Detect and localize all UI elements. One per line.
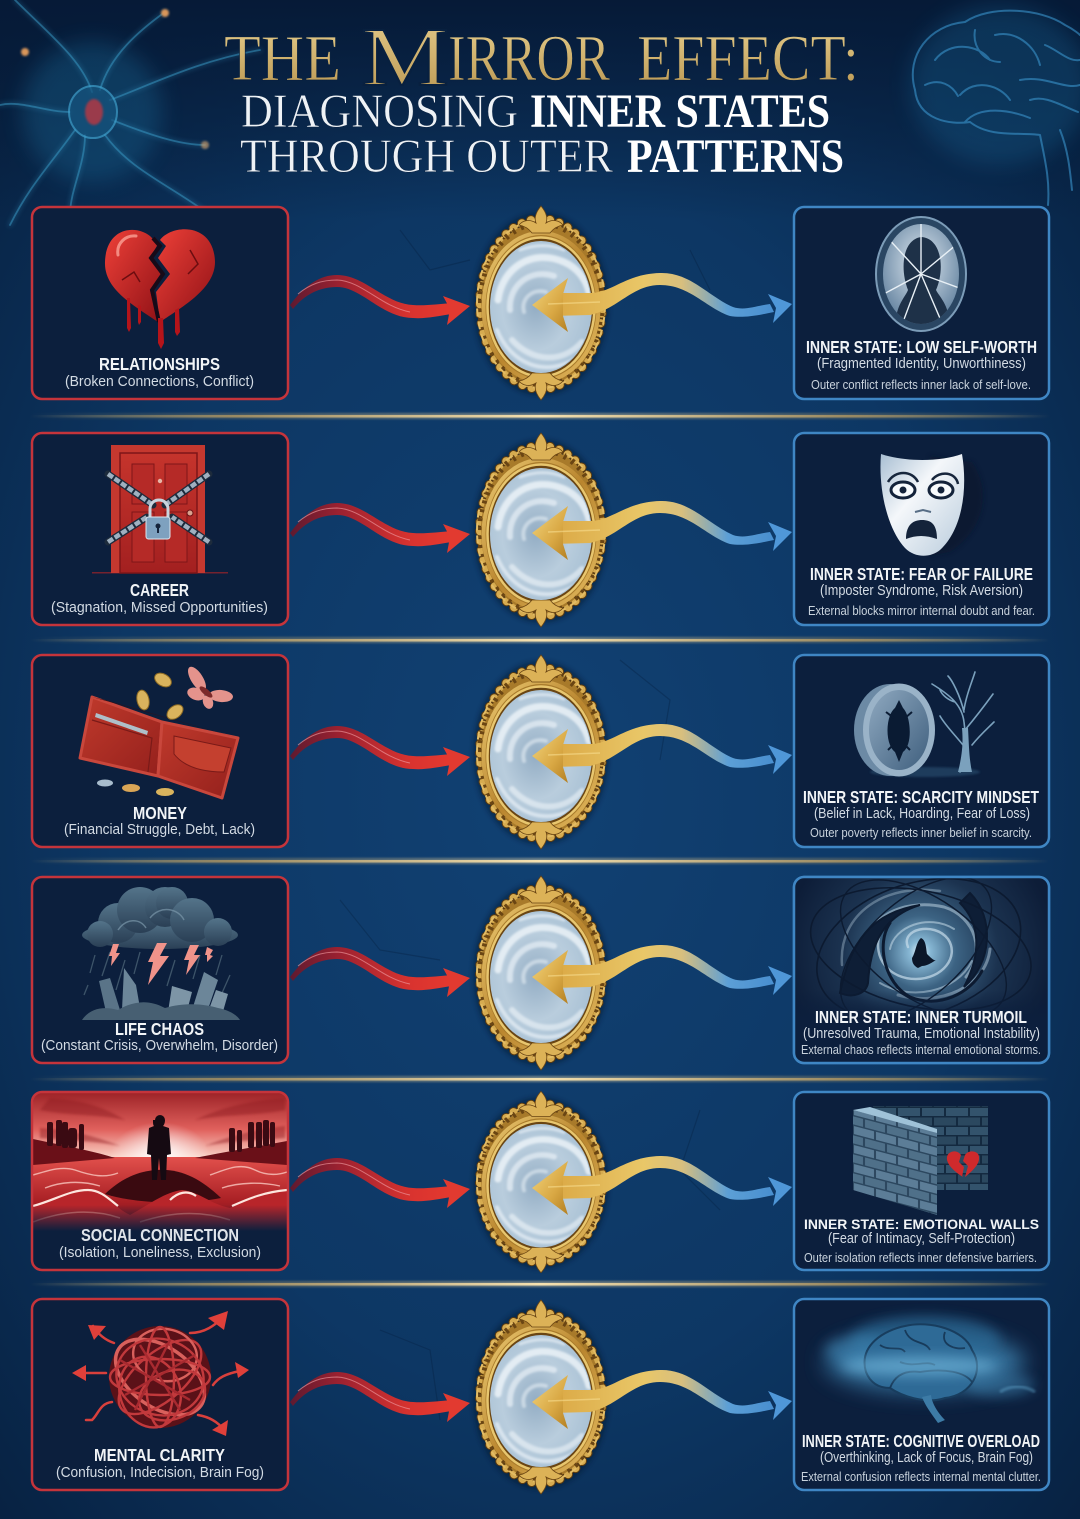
subheading: low self-worth: (Fragmented Identity, Unworthiness) — [817, 355, 1026, 372]
panel: fear of failure — [794, 433, 1049, 625]
title line 3 — [240, 130, 844, 183]
icon: chained door — [92, 445, 228, 574]
icon: fearful mask — [880, 454, 983, 556]
subheading: fear of failure: (Imposter Syndrome, Risk Aversion) — [820, 582, 1023, 599]
panel: life chaos — [32, 877, 288, 1063]
title line 3: THROUGH OUTER — [240, 130, 613, 183]
label: life chaos: LIFE CHAOS — [115, 1019, 204, 1039]
sublabel: career: (Stagnation, Missed Opportunities) — [51, 599, 268, 616]
label: mental clarity: MENTAL CLARITY — [94, 1445, 225, 1465]
note: emotional walls: Outer isolation reflects inner defensive barriers. — [804, 1250, 1037, 1265]
panel: career — [32, 433, 288, 625]
decoration: brain — [910, 5, 1080, 205]
panel: low self-worth — [794, 207, 1049, 399]
row 6 — [32, 1299, 1049, 1494]
panel: inner turmoil — [794, 851, 1049, 1063]
icon: brain in fog — [825, 1316, 1035, 1423]
sublabel: money: (Financial Struggle, Debt, Lack) — [64, 821, 255, 838]
note: cognitive overload: External confusion reflects internal mental clutter. — [801, 1469, 1041, 1484]
note: scarcity mindset: Outer poverty reflects inner belief in scarcity. — [810, 825, 1032, 840]
title line 1: M — [361, 11, 449, 104]
flow arrows — [290, 1370, 792, 1429]
icon: hollow coin and bare tree — [854, 672, 994, 777]
title line 1: THE — [224, 22, 341, 95]
mirror — [473, 1300, 609, 1494]
panel: cognitive overload — [794, 1299, 1049, 1490]
heading: emotional walls: INNER STATE: EMOTIONAL WALLS — [804, 1216, 1039, 1232]
sublabel: relationships: (Broken Connections, Conflict) — [65, 373, 254, 390]
row 3 — [32, 655, 1049, 849]
icon: broken heart — [105, 229, 215, 349]
title line 1: EFFECT: — [637, 22, 859, 95]
subheading: inner turmoil: (Unresolved Trauma, Emotional Instability) — [803, 1025, 1040, 1042]
decoration: neuron — [0, 0, 260, 225]
heading: inner turmoil: INNER STATE: INNER TURMOIL — [815, 1007, 1027, 1027]
label: relationships: RELATIONSHIPS — [99, 354, 220, 374]
panel: social connection — [32, 1092, 288, 1270]
mirror — [473, 206, 609, 400]
sublabel: social connection: (Isolation, Loneliness, Exclusion) — [59, 1244, 261, 1261]
panel: scarcity mindset — [794, 655, 1049, 847]
flow arrows — [290, 724, 792, 783]
subheading: emotional walls: (Fear of Intimacy, Self-Protection) — [828, 1230, 1015, 1247]
flow arrows — [290, 501, 792, 560]
sublabel: life chaos: (Constant Crisis, Overwhelm, Disorder) — [41, 1037, 278, 1054]
row 5 — [32, 1091, 1049, 1273]
flow arrows — [290, 945, 792, 1004]
panel: relationships — [32, 207, 288, 399]
panel: mental clarity — [32, 1299, 288, 1490]
row 1 — [32, 206, 1049, 400]
flow arrows — [290, 273, 792, 332]
title — [224, 11, 859, 183]
row 2 — [32, 433, 1049, 627]
flow arrows — [290, 1156, 792, 1215]
panel: money — [32, 655, 288, 847]
mirror — [473, 1091, 609, 1273]
mirror — [473, 655, 609, 849]
subheading: scarcity mindset: (Belief in Lack, Hoarding, Fear of Loss) — [814, 805, 1030, 822]
label: money: MONEY — [133, 803, 187, 823]
icon: moth — [184, 664, 233, 710]
title line 1: IRROR — [448, 22, 610, 95]
title line 2 — [241, 85, 830, 138]
label: career: CAREER — [130, 580, 189, 600]
sublabel: mental clarity: (Confusion, Indecision, Brain Fog) — [56, 1464, 264, 1481]
icon: shattered oval mirror — [876, 217, 966, 331]
mirror — [473, 876, 609, 1070]
note: fear of failure: External blocks mirror internal doubt and fear. — [808, 603, 1035, 618]
icon: vortex — [795, 878, 1048, 1062]
note: low self-worth: Outer conflict reflects inner lack of self-love. — [811, 377, 1031, 392]
icon: storm over ruined city — [82, 887, 240, 1020]
note: inner turmoil: External chaos reflects internal emotional storms. — [801, 1042, 1041, 1057]
title line 3: PATTERNS — [627, 130, 844, 183]
title line 2: INNER STATES — [530, 85, 830, 138]
title line 1 — [224, 11, 859, 104]
illustration: lone figure on red sea — [33, 1093, 287, 1230]
icon: empty wallet — [80, 664, 238, 798]
title line 2: DIAGNOSING — [241, 85, 518, 138]
icon: brick wall and heart — [853, 1106, 988, 1215]
icon: tangled yarn with arrows — [72, 1311, 249, 1436]
mirror — [473, 433, 609, 627]
panel: emotional walls — [794, 1092, 1049, 1270]
label: social connection: SOCIAL CONNECTION — [81, 1225, 239, 1245]
row 4 — [30, 876, 1050, 1070]
